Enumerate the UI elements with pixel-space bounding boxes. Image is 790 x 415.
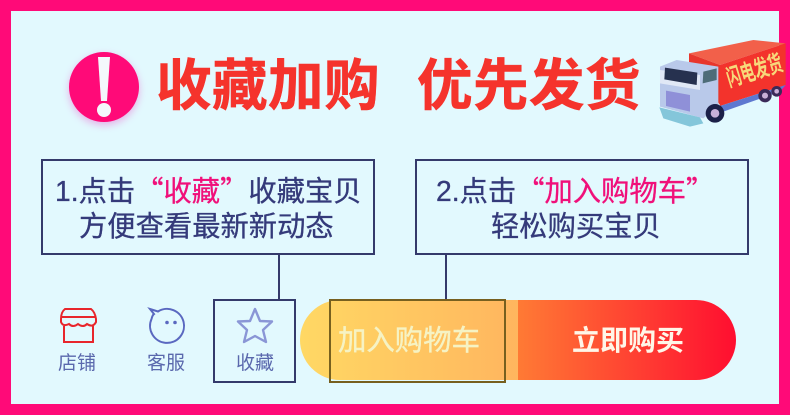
label: favourite: 收藏 — [236, 353, 274, 374]
text: favourite line two: 方便查看最新新动态 — [79, 210, 334, 242]
text: favourite line one: 1.点击“收藏”收藏宝贝 — [55, 169, 362, 210]
highlight: cart box — [329, 299, 506, 383]
label: shop: 店铺 — [58, 353, 96, 374]
connector: cart — [445, 254, 447, 300]
icon: customer service — [147, 307, 185, 344]
text: cart line one: 2.点击“加入购物车” — [436, 169, 714, 210]
panel: add to cart instructions — [415, 159, 749, 255]
label: customer service: 客服 — [147, 353, 185, 374]
icon: exclamation badge — [64, 50, 144, 130]
icon: delivery truck — [659, 40, 786, 127]
text: cart line two: 轻松购买宝贝 — [491, 210, 661, 242]
highlight: favourite box — [213, 299, 296, 383]
label: add to cart: 加入购物车 — [338, 325, 480, 357]
connector: favourite — [278, 254, 280, 300]
icon: shop — [60, 308, 97, 343]
icon: star — [236, 308, 274, 344]
label: buy now: 立即购买 — [572, 325, 684, 356]
title: right: 优先发货 — [417, 55, 641, 117]
panel: favourite instructions — [41, 159, 375, 255]
button: buy now — [518, 300, 736, 380]
title: left: 收藏加购 — [156, 55, 380, 117]
button: add to cart — [300, 300, 540, 380]
icon: delivery truck: 闪电发货 — [723, 49, 786, 92]
